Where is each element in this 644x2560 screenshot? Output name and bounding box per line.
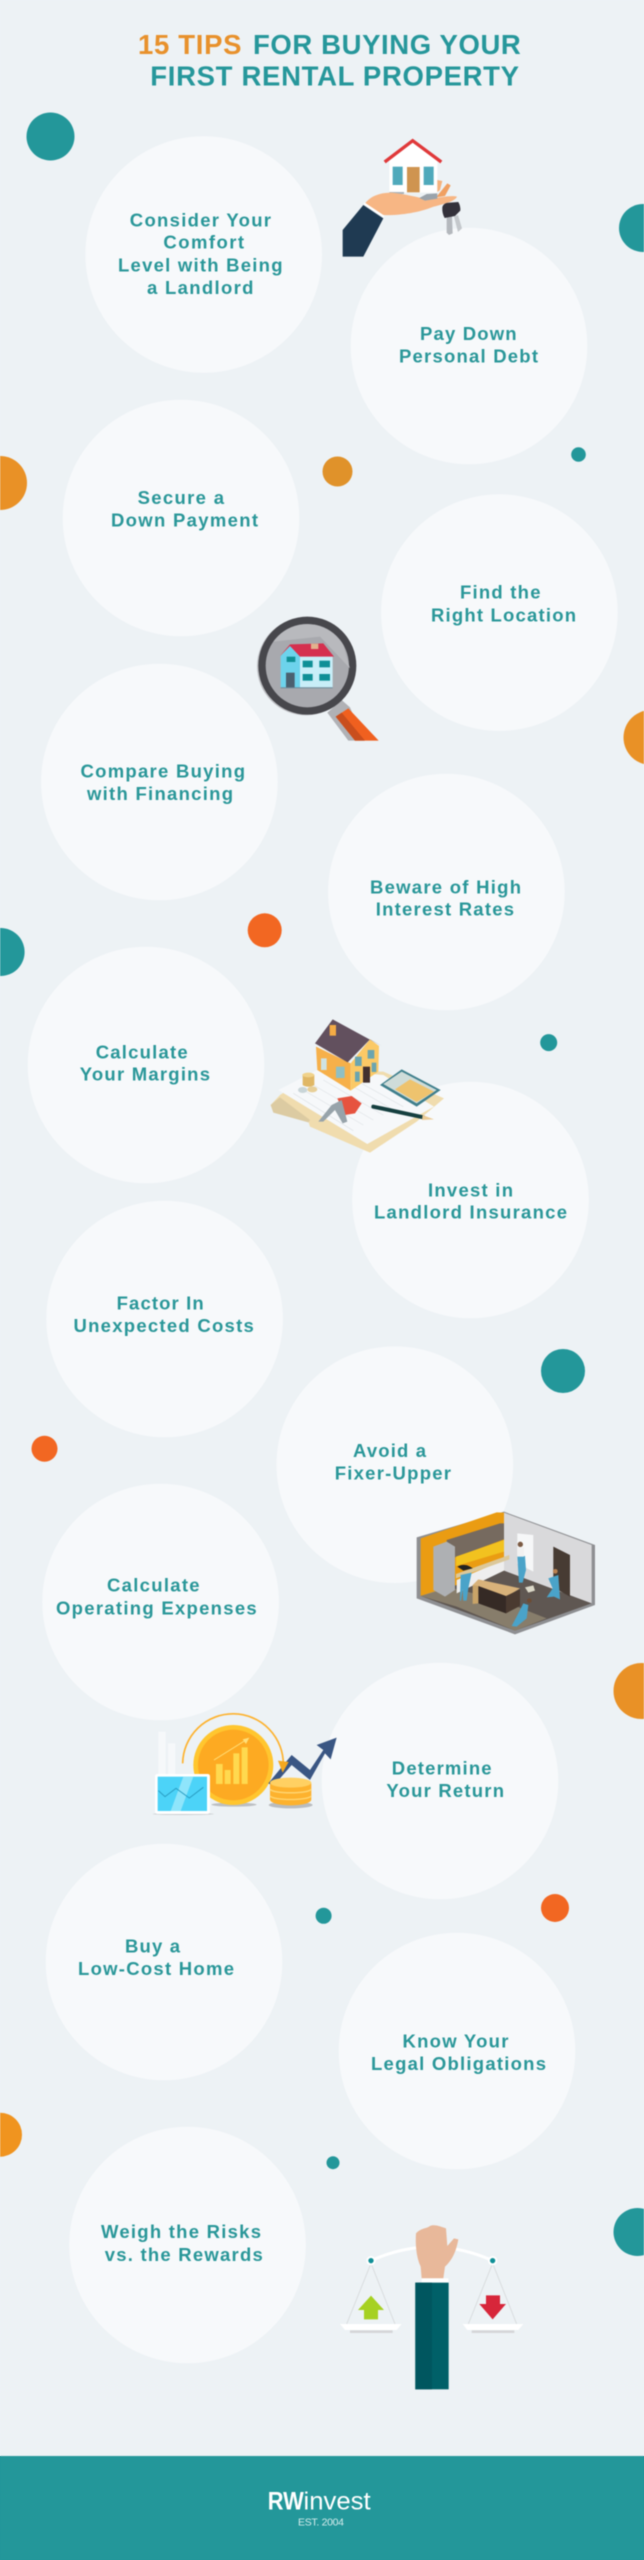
panel: tip 14: Know Your (402, 2030, 508, 2052)
panel: tip 1: Comfort (163, 232, 244, 253)
panel: tip 15: vs. the Rewards (105, 2244, 263, 2265)
title: FOR BUYING YOUR (253, 29, 521, 60)
panel: tip 13: Low-Cost Home (78, 1958, 234, 1979)
panel: tip 11: Operating Expenses (56, 1597, 257, 1618)
logo (268, 2487, 371, 2529)
panel: tip 5: Compare Buying (80, 760, 245, 781)
panel: tip 8: Landlord Insurance (374, 1202, 567, 1223)
panel: tip 14: Legal Obligations (371, 2053, 546, 2074)
panel: tip 1: Level with Being (118, 255, 282, 276)
panel: tip 1 (85, 136, 322, 373)
panel: tip 2 (351, 228, 587, 464)
panel: tip 8 (352, 1082, 589, 1318)
panel: tip 1: a Landlord (147, 277, 253, 298)
panel: tip 4 (381, 494, 618, 731)
panel: tip 5 (41, 664, 278, 900)
panel: tip 8: Invest in (428, 1179, 513, 1200)
panel: tip 6: Beware of High (370, 876, 521, 897)
panel: tip 7 (28, 947, 264, 1183)
panel: tip 5: with Financing (86, 783, 233, 804)
panel: tip 10 (276, 1346, 513, 1583)
panel: tip 2: Pay Down (420, 323, 517, 344)
panel: tip 13: Buy a (125, 1936, 181, 1957)
panel: tip 12 (322, 1663, 558, 1899)
panel: tip 11 (42, 1484, 279, 1720)
panel: tip 9: Unexpected Costs (74, 1315, 254, 1336)
panel: tip 9 (46, 1201, 283, 1437)
panel: tip 3 (63, 400, 299, 636)
icon: hand holding balance scale (340, 2225, 523, 2389)
panel: tip 1: Consider Your (130, 210, 271, 231)
panel: tip 7: Your Margins (80, 1063, 210, 1084)
panel: tip 9: Factor In (117, 1293, 204, 1314)
icon: renovation room (417, 1512, 595, 1634)
panel: tip 3: Secure a (138, 487, 225, 508)
panel: tip 4: Find the (460, 582, 540, 603)
panel: tip 15 (69, 2127, 306, 2363)
icon: coin, chart and rising arrow (153, 1714, 337, 1815)
panel: tip 4: Right Location (431, 604, 576, 625)
panel: tip 15: Weigh the Risks (101, 2221, 261, 2242)
panel: tip 6: Interest Rates (376, 899, 514, 920)
panel: tip 10: Avoid a (353, 1440, 427, 1461)
panel: tip 12: Your Return (386, 1780, 504, 1801)
title: 15 TIPS (138, 29, 242, 60)
logo: invest (304, 2487, 371, 2515)
icon: house on contract with calculator (271, 1019, 444, 1153)
footer band (0, 2456, 644, 2560)
panel: tip 11: Calculate (107, 1575, 200, 1596)
panel: tip 13 (46, 1844, 282, 2080)
title (138, 29, 521, 92)
logo: EST. 2004 (298, 2517, 344, 2529)
panel: tip 12: Determine (392, 1757, 492, 1778)
icon: hand holding house and keys (343, 141, 462, 257)
panel: tip 7: Calculate (96, 1041, 188, 1062)
panel: tip 14 (339, 1933, 575, 2169)
panel: tip 6 (328, 774, 565, 1010)
icon: magnifying glass over house (257, 617, 379, 741)
title: FIRST RENTAL PROPERTY (150, 61, 519, 92)
panel: tip 10: Fixer-Upper (335, 1462, 451, 1483)
panel: tip 2: Personal Debt (399, 346, 538, 367)
panel: tip 3: Down Payment (111, 510, 258, 531)
logo: RW (268, 2487, 304, 2515)
